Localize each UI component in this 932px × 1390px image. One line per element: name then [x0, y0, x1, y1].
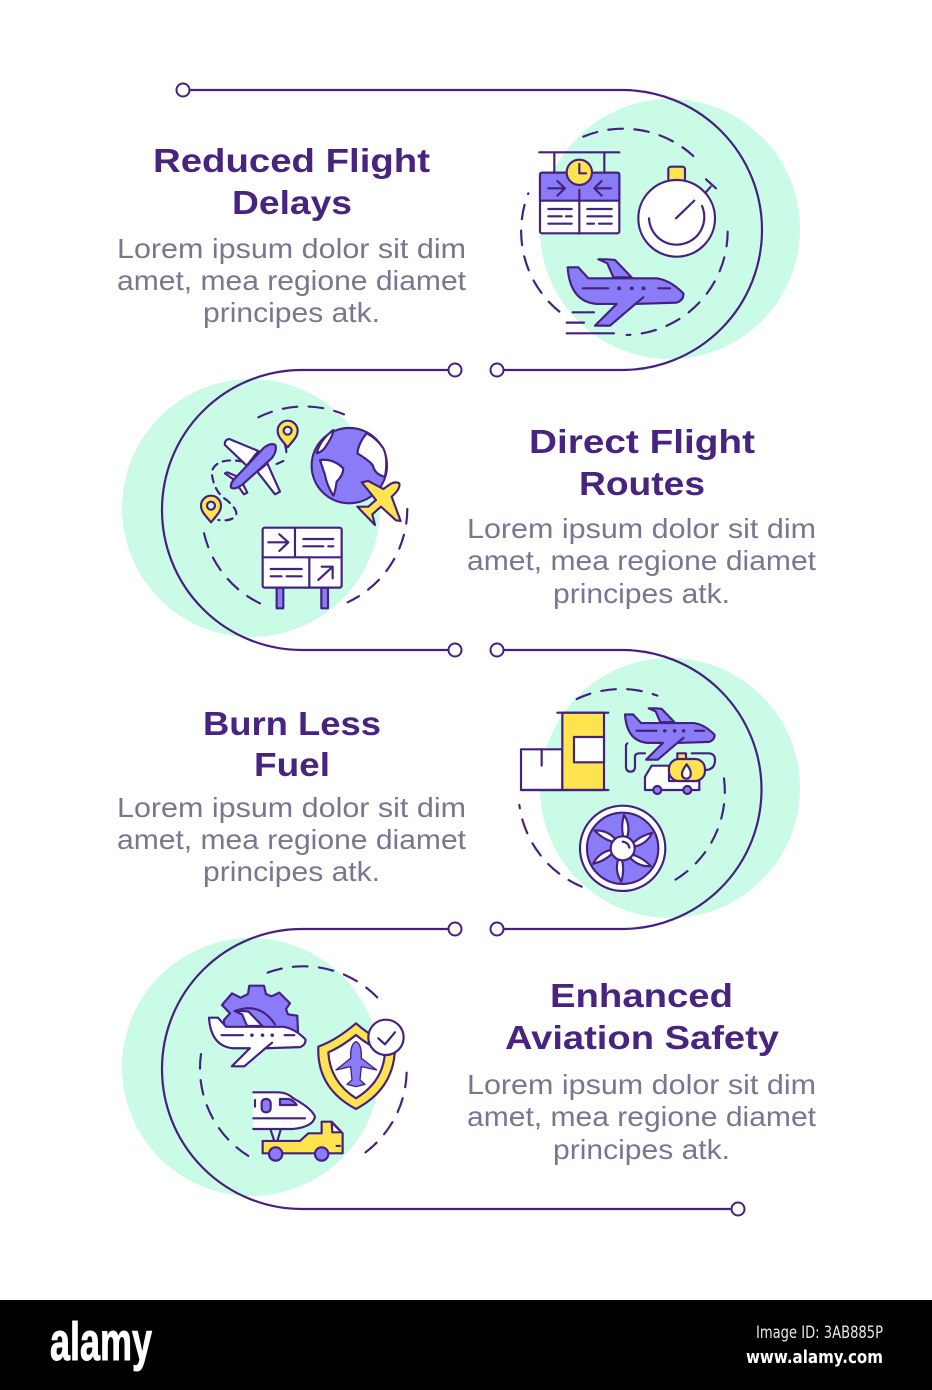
heading: Burn Less Fuel: Fuel [254, 746, 330, 783]
text block: step 2 description [467, 513, 816, 609]
text block: step 1 description: Lorem ipsum dolor sit dim [117, 233, 466, 264]
text block: step 2 description: principes atk. [553, 578, 730, 609]
icon group: step 4 [200, 966, 407, 1161]
icon: stopwatch [638, 167, 716, 257]
heading: Enhanced Aviation Safety: Aviation Safety [505, 1019, 780, 1056]
text block: step 1 description [117, 233, 466, 328]
heading: Direct Flight Routes: Routes [579, 465, 705, 502]
text block: step 4 description: Lorem ipsum dolor sit dim [467, 1069, 816, 1100]
mint circle: step 1 [540, 99, 800, 359]
text block: step 1 description: principes atk. [203, 297, 380, 328]
text block: step 4 description [467, 1069, 816, 1165]
icon: jet engine fan [580, 806, 665, 891]
text block: step 2 description: Lorem ipsum dolor sit dim [467, 513, 816, 544]
footer bar [0, 1300, 932, 1390]
text block: step 2 description: amet, mea regione diamet [467, 545, 816, 576]
text block: step 3 description [117, 792, 466, 887]
mint circle: step 2 [122, 379, 380, 637]
footer logo: alamy [50, 1312, 152, 1372]
text block: step 3 description: Lorem ipsum dolor sit dim [117, 792, 466, 823]
mint circle: step 3 [540, 658, 800, 918]
icon: flight route with pins [201, 421, 298, 522]
icon: globe with yellow plane [312, 428, 401, 525]
heading: Enhanced Aviation Safety: Enhanced [550, 977, 733, 1014]
heading: Reduced Flight Delays: Reduced Flight [153, 142, 430, 179]
icon: cargo boxes [521, 713, 608, 790]
icon: direction sign board [263, 528, 342, 608]
text block: step 1 description: amet, mea regione diamet [117, 265, 466, 296]
icon: fuel truck [626, 743, 715, 794]
heading: Reduced Flight Delays: Delays [232, 184, 352, 221]
icon: departure board with clock [539, 152, 619, 233]
heading: Burn Less Fuel [203, 705, 381, 783]
icon: tow truck with aircraft nose [253, 1092, 343, 1161]
icon: moving airplane [567, 259, 683, 333]
mint circle: step 4 [122, 938, 380, 1196]
website: www.alamy.com [746, 1347, 883, 1368]
text block: step 3 description: amet, mea regione diamet [117, 824, 466, 855]
heading: Burn Less Fuel: Burn Less [203, 705, 381, 742]
text block: step 4 description: principes atk. [553, 1134, 730, 1165]
icon group: step 3 [519, 689, 725, 891]
text block: step 4 description: amet, mea regione diamet [467, 1101, 816, 1132]
heading: Direct Flight Routes: Direct Flight [529, 423, 755, 460]
icon: safety shield with check [318, 1020, 404, 1109]
icon group: step 2 [201, 406, 407, 608]
icon group: step 1 [521, 129, 728, 335]
heading: Reduced Flight Delays [153, 142, 430, 221]
icon: airplane [625, 708, 715, 760]
timeline connector [162, 84, 762, 1216]
heading: Enhanced Aviation Safety [505, 977, 780, 1056]
text block: step 3 description: principes atk. [203, 856, 380, 887]
heading: Direct Flight Routes [529, 423, 755, 502]
image id: Image ID: 3AB885P [756, 1323, 883, 1343]
icon: gear with white airplane [209, 986, 305, 1066]
